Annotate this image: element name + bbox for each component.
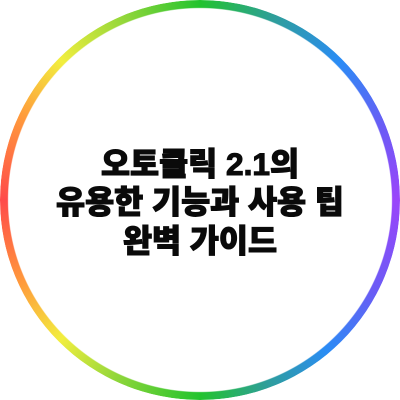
- title: [56, 146, 344, 258]
- title: 완벽 가이드: [123, 222, 277, 258]
- title: 유용한 기능과 사용 팁: [56, 184, 344, 220]
- title: 오토클릭 2.1의: [101, 146, 299, 182]
